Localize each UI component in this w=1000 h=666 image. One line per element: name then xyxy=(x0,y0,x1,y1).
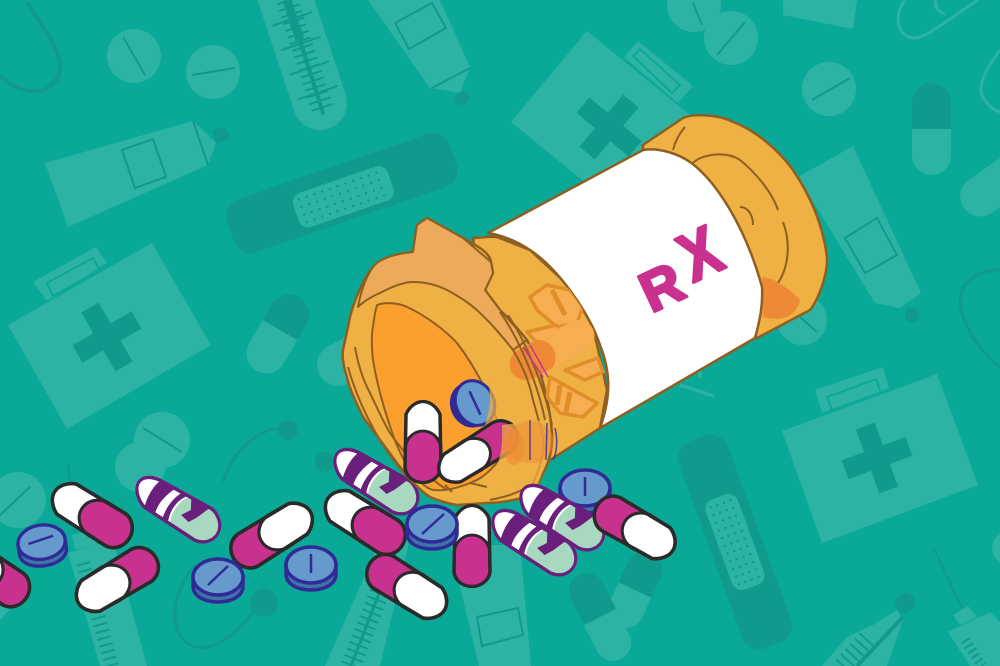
pills seen through bottle xyxy=(504,285,603,417)
tablet xyxy=(407,506,457,549)
icon: capsule bottom right of centre xyxy=(602,546,668,634)
label text: RX xyxy=(621,211,737,324)
tablet xyxy=(560,470,610,513)
icon: capsule left xyxy=(239,287,316,381)
tablet xyxy=(16,522,68,569)
capsule xyxy=(587,490,683,566)
icon: thermometer bottom right xyxy=(822,593,915,666)
icon: tube left xyxy=(45,121,230,227)
icon: box top right xyxy=(783,0,857,29)
icon: capsule bottom xyxy=(563,567,637,666)
orange capsule seen through rear xyxy=(762,277,800,319)
icon: capsule behind bottle xyxy=(338,350,365,365)
icon: syringe bottom right xyxy=(933,547,1000,666)
icon: tablet score lines xyxy=(0,3,850,515)
icon: first aid kit right xyxy=(782,367,978,543)
purple-green capsule xyxy=(128,471,227,548)
spilled pills xyxy=(0,470,683,626)
bottle base (rear) xyxy=(640,115,827,338)
tablet xyxy=(193,559,243,602)
label text: RX: X xyxy=(667,211,734,297)
capsule in opening, vertical xyxy=(405,402,441,482)
lip upper tab xyxy=(358,218,527,350)
icon: tube right xyxy=(798,146,921,322)
label text: RX: R xyxy=(630,250,693,324)
capsule xyxy=(69,541,165,619)
capsule xyxy=(45,476,139,554)
icon: scissors top right xyxy=(898,0,1000,112)
tablet xyxy=(286,547,336,590)
capsule xyxy=(318,483,412,561)
bottle mouth lip xyxy=(343,218,552,505)
bottle rear creases xyxy=(673,127,788,283)
purple-green capsule xyxy=(484,504,583,581)
icon: tube top xyxy=(368,0,470,105)
icon: syringe bottom left xyxy=(68,463,147,666)
magenta rim lines over capsule xyxy=(523,345,548,377)
bottle opening xyxy=(372,303,500,490)
pill bottle xyxy=(343,115,827,505)
icon: stethoscope top left xyxy=(0,2,60,91)
capsule xyxy=(360,548,454,626)
clear body section xyxy=(473,237,607,460)
icon: thermometer top xyxy=(282,0,323,113)
capsule xyxy=(454,506,490,586)
icon: light wedge bottom left xyxy=(0,590,28,620)
tablet overlay tint xyxy=(485,383,502,430)
ghost tablet and capsule end xyxy=(504,420,557,465)
capsule in opening, diagonal xyxy=(432,414,524,490)
capsule xyxy=(0,532,37,614)
icon: stand behind bottle xyxy=(680,350,714,396)
icon: stethoscope lower left xyxy=(175,420,335,647)
icon: band-aid right xyxy=(673,430,797,654)
icon: thermometer bottom centre xyxy=(325,530,412,666)
icon: capsule far right xyxy=(952,146,1000,224)
icon: band-aid left xyxy=(221,128,463,258)
white label xyxy=(488,149,762,428)
pill behind bottle xyxy=(326,443,425,520)
icon: first aid kit left xyxy=(8,243,211,429)
capsule xyxy=(224,495,320,575)
icon: tube bottom centre xyxy=(450,545,531,666)
purple-green capsule xyxy=(512,479,611,556)
lip contour lines xyxy=(348,312,552,500)
tablet in opening xyxy=(443,374,502,434)
icon: stethoscope right xyxy=(960,270,1000,367)
icon: capsule right xyxy=(912,83,951,175)
translucent lip overlay xyxy=(490,420,549,489)
icon: first aid kit top xyxy=(511,31,693,206)
